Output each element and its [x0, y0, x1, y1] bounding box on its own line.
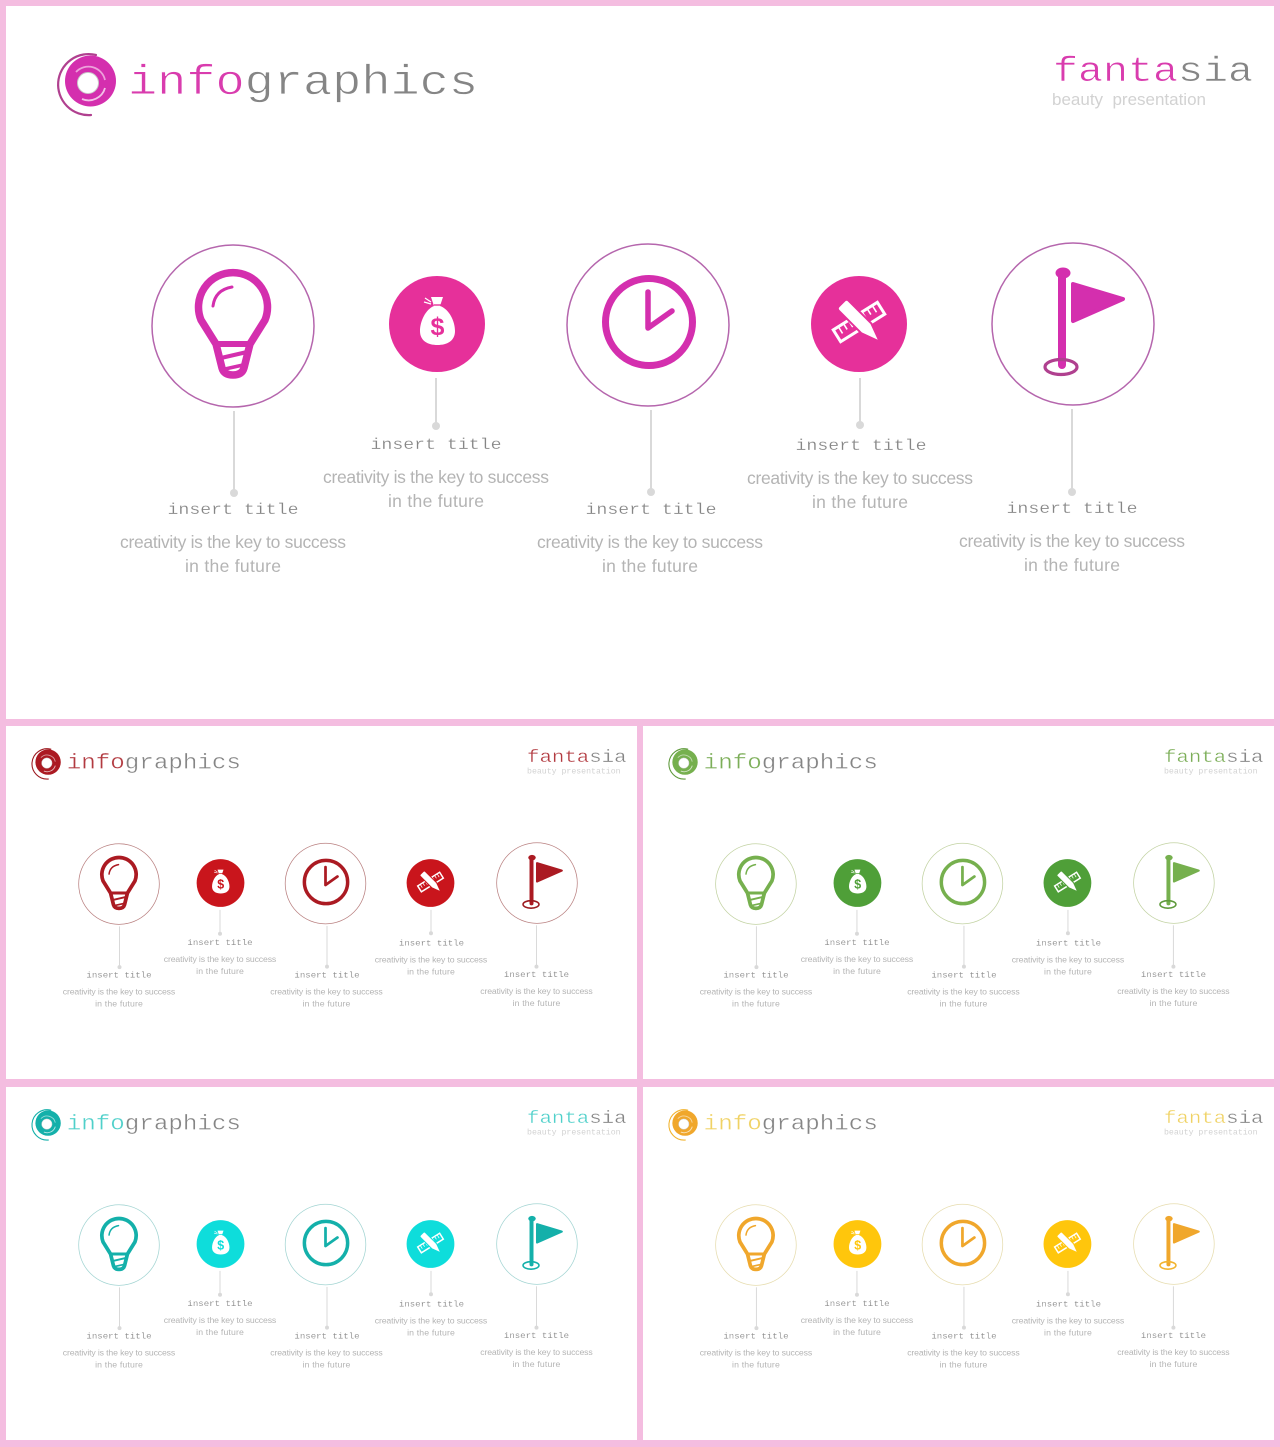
yellow item 2: money bag: creativity is the key to success	[801, 1315, 914, 1325]
teal item 2: money bag: creativity is the key to success	[164, 1315, 277, 1325]
red item 3: clock: in the future	[303, 998, 351, 1008]
red item 1: light bulb: insert title	[86, 972, 152, 981]
item 1: light bulb: insert title	[168, 501, 298, 519]
teal item 3: clock: creativity is the key to success	[270, 1347, 383, 1357]
item 5: flag	[959, 243, 1185, 575]
teal item 2: money bag: in the future	[196, 1327, 244, 1337]
brand subtitle: yellow panel: beauty presentation	[1164, 1128, 1258, 1138]
item 4: ruler and pencil: in the future	[812, 492, 908, 512]
green item 2: money bag: creativity is the key to success	[801, 954, 914, 964]
item 5: flag: creativity is the key to success	[959, 531, 1185, 551]
green item 2: money bag: in the future	[833, 966, 881, 976]
brand: red fantasia: fanta sia	[527, 749, 627, 768]
teal item 4: ruler and pencil: insert title	[399, 1301, 464, 1310]
red item 2: money bag	[164, 859, 277, 976]
red item 3: clock: creativity is the key to success	[270, 986, 383, 996]
yellow item 2: money bag	[801, 1220, 914, 1337]
teal item 3: clock	[270, 1204, 383, 1369]
red item 1: light bulb: in the future	[95, 998, 143, 1008]
teal item 3: clock: insert title	[294, 1333, 360, 1342]
brand: teal fantasia: fanta sia	[527, 1110, 627, 1129]
yellow item 4: ruler and pencil: creativity is the key to success	[1012, 1316, 1125, 1326]
teal item 1: light bulb	[63, 1205, 176, 1369]
green item 2: money bag: $	[854, 877, 861, 891]
green item 3: clock: in the future	[940, 998, 987, 1008]
logo: yellow spiral	[669, 1110, 698, 1140]
logo: spiral	[58, 54, 116, 115]
teal item 4: ruler and pencil: creativity is the key to success	[375, 1316, 488, 1326]
item 5: flag: in the future	[1024, 555, 1120, 575]
yellow item 4: ruler and pencil: in the future	[1044, 1328, 1092, 1338]
red item 2: money bag: insert title	[187, 939, 253, 948]
yellow item 2: money bag: in the future	[833, 1327, 881, 1337]
teal item 2: money bag: insert title	[187, 1300, 253, 1309]
red item 5: flag: in the future	[513, 998, 561, 1008]
logo: green spiral	[669, 749, 698, 779]
red item 4: ruler and pencil	[375, 859, 488, 977]
brand: fantasia: fanta sia	[1053, 52, 1253, 92]
teal item 1: light bulb: insert title	[86, 1333, 152, 1342]
heading: teal infographics: infographics	[67, 1114, 241, 1137]
teal item 4: ruler and pencil: in the future	[407, 1328, 455, 1338]
yellow item 1: light bulb: creativity is the key to success	[700, 1347, 813, 1357]
item 3: clock	[537, 244, 763, 576]
heading: yellow infographics: infographics	[704, 1114, 878, 1137]
brand: green fantasia: fanta sia	[1164, 749, 1263, 768]
teal item 5: flag: creativity is the key to success	[480, 1347, 593, 1357]
yellow item 2: money bag: insert title	[824, 1300, 890, 1309]
teal item 2: money bag: $	[217, 1238, 224, 1252]
yellow item 3: clock: insert title	[931, 1333, 997, 1342]
yellow item 2: money bag: $	[854, 1238, 861, 1252]
item 1: light bulb	[120, 245, 346, 576]
yellow item 5: flag: creativity is the key to success	[1117, 1347, 1230, 1357]
item 3: clock: creativity is the key to success	[537, 532, 763, 552]
item 1: light bulb: in the future	[185, 556, 281, 576]
yellow item 3: clock	[907, 1204, 1020, 1369]
item 2: money bag: in the future	[388, 491, 484, 511]
teal item 3: clock: in the future	[303, 1359, 351, 1369]
red item 2: money bag: in the future	[196, 966, 244, 976]
red item 3: clock	[270, 843, 383, 1008]
green item 4: ruler and pencil: in the future	[1044, 967, 1092, 977]
yellow item 1: light bulb	[700, 1205, 813, 1369]
brand subtitle: green panel: beauty presentation	[1164, 767, 1258, 777]
brand subtitle: teal panel: beauty presentation	[527, 1128, 621, 1138]
yellow item 5: flag: in the future	[1150, 1359, 1197, 1369]
teal item 2: money bag	[164, 1220, 277, 1337]
red item 2: money bag: creativity is the key to success	[164, 954, 277, 964]
yellow item 1: light bulb: insert title	[723, 1333, 789, 1342]
red item 5: flag: insert title	[504, 971, 569, 980]
brand: yellow fantasia: fanta sia	[1164, 1110, 1263, 1129]
red item 5: flag: creativity is the key to success	[480, 986, 593, 996]
yellow item 4: ruler and pencil: insert title	[1036, 1301, 1101, 1310]
green item 3: clock: creativity is the key to success	[907, 986, 1020, 996]
panel: main pink infographic	[6, 6, 1274, 719]
green item 5: flag: in the future	[1150, 998, 1197, 1008]
yellow item 1: light bulb: in the future	[732, 1359, 780, 1369]
yellow item 4: ruler and pencil	[1012, 1220, 1125, 1338]
green item 1: light bulb: creativity is the key to success	[700, 986, 813, 996]
green item 1: light bulb: insert title	[723, 972, 789, 981]
heading: infographics: info graphics	[128, 59, 478, 107]
teal item 4: ruler and pencil	[375, 1220, 488, 1338]
panel: red variant	[6, 726, 637, 1079]
red item 1: light bulb: creativity is the key to success	[63, 986, 176, 996]
item 5: flag: insert title	[1006, 500, 1138, 518]
logo: red spiral	[32, 749, 61, 779]
green item 3: clock	[907, 843, 1020, 1008]
panel: teal variant	[6, 1087, 637, 1440]
red item 3: clock: insert title	[294, 972, 360, 981]
red item 1: light bulb	[63, 844, 176, 1008]
item 2: money bag: creativity is the key to success	[323, 467, 549, 487]
item 2: money bag: $	[431, 313, 445, 341]
green item 1: light bulb	[700, 844, 813, 1008]
yellow item 5: flag	[1117, 1204, 1230, 1369]
green item 5: flag: creativity is the key to success	[1117, 986, 1230, 996]
red item 4: ruler and pencil: in the future	[407, 967, 455, 977]
green item 5: flag	[1117, 843, 1230, 1008]
item 3: clock: insert title	[586, 501, 716, 519]
green item 4: ruler and pencil	[1012, 859, 1125, 977]
teal item 1: light bulb: in the future	[95, 1359, 143, 1369]
item 1: light bulb: creativity is the key to success	[120, 532, 346, 552]
item 4: ruler and pencil: insert title	[796, 437, 926, 455]
item 4: ruler and pencil: creativity is the key to success	[747, 468, 973, 488]
brand subtitle: beauty presentation	[1052, 90, 1206, 109]
green item 2: money bag: insert title	[824, 939, 890, 948]
teal item 5: flag: in the future	[513, 1359, 561, 1369]
yellow item 3: clock: in the future	[940, 1359, 987, 1369]
teal item 5: flag: insert title	[504, 1332, 569, 1341]
teal item 1: light bulb: creativity is the key to success	[63, 1347, 176, 1357]
item 2: money bag: insert title	[370, 436, 502, 454]
panel: green variant	[643, 726, 1274, 1079]
red item 5: flag	[480, 843, 593, 1008]
red item 4: ruler and pencil: insert title	[399, 940, 464, 949]
green item 4: ruler and pencil: insert title	[1036, 940, 1101, 949]
panel: yellow variant	[643, 1087, 1274, 1440]
yellow item 5: flag: insert title	[1141, 1332, 1206, 1341]
logo: teal spiral	[32, 1110, 61, 1140]
item 2: money bag	[323, 276, 549, 511]
green item 2: money bag	[801, 859, 914, 976]
green item 1: light bulb: in the future	[732, 998, 780, 1008]
yellow item 3: clock: creativity is the key to success	[907, 1347, 1020, 1357]
brand subtitle: red panel: beauty presentation	[527, 767, 621, 777]
green item 4: ruler and pencil: creativity is the key to success	[1012, 955, 1125, 965]
red item 2: money bag: $	[217, 877, 224, 891]
heading: green infographics: infographics	[704, 753, 878, 776]
heading: red infographics: infographics	[67, 753, 241, 776]
green item 5: flag: insert title	[1141, 971, 1206, 980]
red item 4: ruler and pencil: creativity is the key to success	[375, 955, 488, 965]
teal item 5: flag	[480, 1204, 593, 1369]
item 4: ruler and pencil	[747, 276, 973, 512]
green item 3: clock: insert title	[931, 972, 997, 981]
item 3: clock: in the future	[602, 556, 698, 576]
